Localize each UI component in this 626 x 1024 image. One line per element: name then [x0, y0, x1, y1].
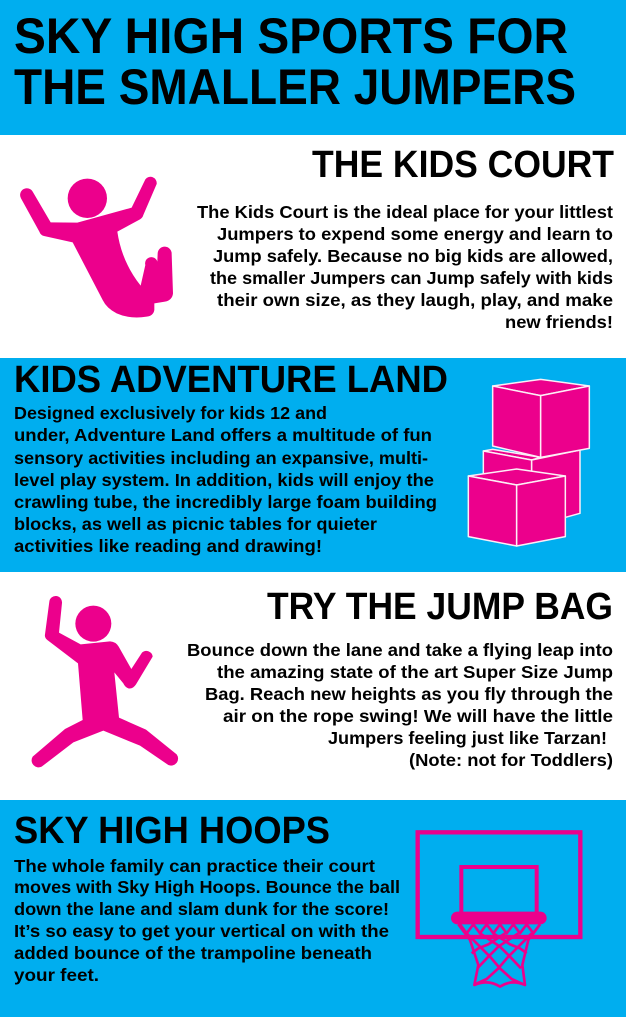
text block: kids court description: the smaller Jumpers can Jump safely with kids: [210, 268, 613, 288]
panel: title banner: [0, 0, 626, 135]
icon: child leaping with legs apart: [32, 596, 178, 767]
text block: jump bag description: Bounce down the lane and take a flying leap into: [187, 640, 613, 660]
panel: sky high hoops: [0, 800, 626, 1017]
text block: adventure land description: Designed exclusively for kids 12 and: [14, 403, 327, 423]
text block: jump bag description: Bag. Reach new heights as you fly through the: [205, 684, 613, 704]
heading: sky high hoops: SKY HIGH HOOPS: [14, 810, 330, 852]
text block: kids court description: [197, 202, 613, 332]
text block: hoops description: down the lane and slam dunk for the score!: [14, 899, 389, 919]
text block: hoops description: added bounce of the trampoline beneath: [14, 943, 372, 963]
panel: the kids court: [0, 135, 626, 358]
text block: adventure land description: level play system. In addition, kids will enjoy the: [14, 470, 434, 490]
text block: jump bag description: Jumpers feeling just like Tarzan!: [328, 728, 607, 748]
text block: adventure land description: under, Adventure Land offers a multitude of fun: [14, 425, 432, 445]
text block: kids court description: their own size, as they laugh, play, and make: [217, 290, 613, 310]
text block: kids court description: new friends!: [505, 312, 613, 332]
panel: try the jump bag: [0, 572, 626, 800]
text block: hoops description: The whole family can practice their court: [14, 856, 375, 876]
text block: adventure land description: activities like reading and drawing!: [14, 536, 322, 556]
title: [14, 8, 576, 115]
icon: stacked foam cubes: [468, 379, 589, 546]
text block: hoops description: [14, 856, 400, 985]
text block: adventure land description: blocks, as well as picnic tables for quieter: [14, 514, 377, 534]
text block: jump bag description: the amazing state of the art Super Size Jump: [217, 662, 613, 682]
text block: adventure land description: crawling tube, the incredibly large foam building: [14, 492, 437, 512]
title: THE SMALLER JUMPERS: [14, 59, 576, 115]
text block: adventure land description: [14, 403, 437, 556]
text block: jump bag description: (Note: not for Toddlers): [409, 750, 613, 770]
icon: basketball hoop: [418, 832, 580, 987]
panel: kids adventure land: [0, 358, 626, 572]
icon: jumping child with arms raised: [20, 177, 173, 317]
text block: jump bag description: air on the rope swing! We will have the little: [223, 706, 613, 726]
text block: adventure land description: sensory activities including an expansive, multi-: [14, 448, 428, 468]
text block: jump bag description: [187, 640, 613, 770]
text block: kids court description: Jumpers to expend some energy and learn to: [217, 224, 613, 244]
text block: kids court description: Jump safely. Because no big kids are allowed,: [213, 246, 613, 266]
text block: hoops description: moves with Sky High Hoops. Bounce the ball: [14, 877, 400, 897]
title: SKY HIGH SPORTS FOR: [14, 8, 568, 64]
text block: hoops description: your feet.: [14, 965, 99, 985]
text block: kids court description: The Kids Court is the ideal place for your littlest: [197, 202, 613, 222]
text block: hoops description: It’s so easy to get your vertical on with the: [14, 921, 389, 941]
heading: kids adventure land: KIDS ADVENTURE LAND: [14, 359, 448, 401]
heading: the kids court: THE KIDS COURT: [312, 144, 614, 186]
